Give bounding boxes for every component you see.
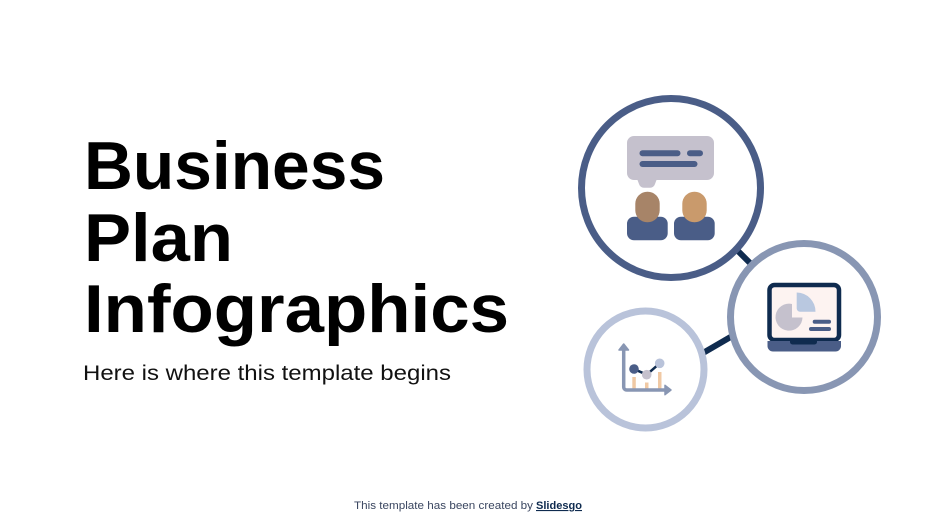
laptop base [768,341,841,352]
ring: laptop [730,244,878,390]
ring: chart [587,311,704,428]
arrowheads [619,344,671,395]
person left [627,192,668,240]
title [84,128,509,347]
laptop screen [770,285,839,340]
laptop notch [790,340,817,344]
bars [632,372,662,390]
trend line [634,363,660,375]
title: Infographics [84,271,509,347]
icon: laptop [768,285,841,352]
pie slice [797,292,816,312]
speech lines [640,150,703,167]
person right [674,192,715,240]
connector: people to laptop [735,248,753,266]
axes [624,346,669,390]
text lines [809,320,831,331]
connector: chart to laptop [703,335,734,353]
speech bubble [627,136,714,188]
icon: chart [619,344,671,395]
title: Plan [84,200,233,276]
pie chart [776,304,802,331]
title: Business [84,128,385,204]
data points [629,364,639,374]
subtitle: Here is where this template begins [83,362,451,385]
footer credit: This template has been created by [354,500,534,512]
footer credit: Slidesgo [536,500,582,512]
icon: people talking [627,136,715,240]
ring: people [582,98,760,278]
